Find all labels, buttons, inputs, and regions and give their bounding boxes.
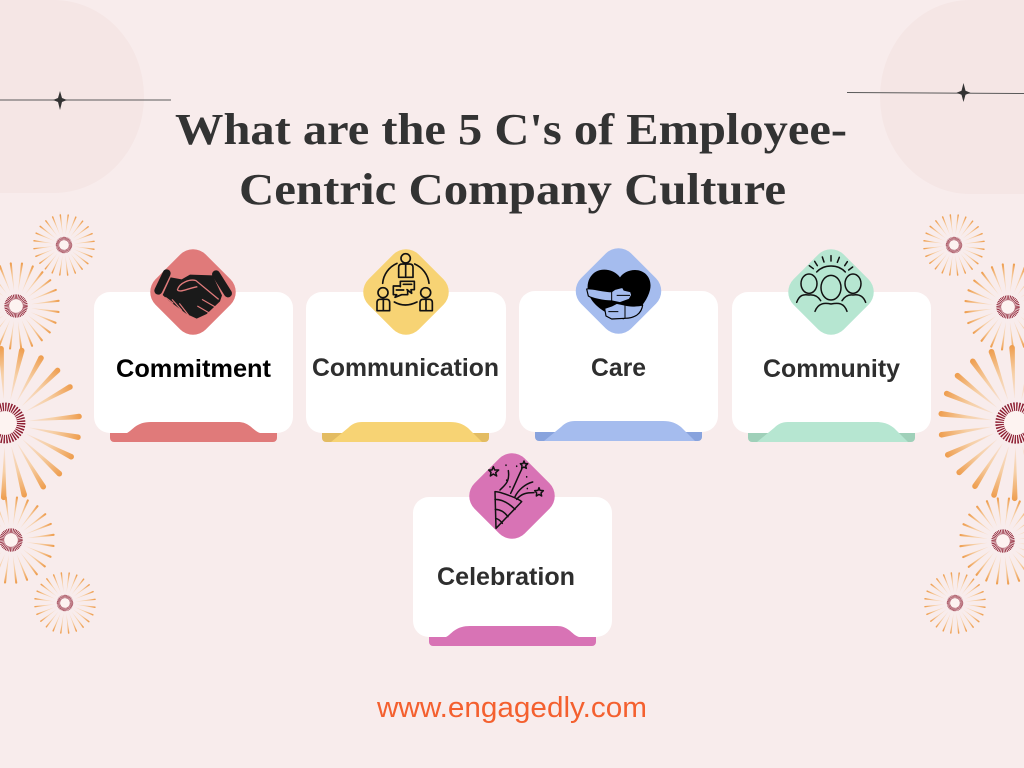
- sparkle line: right: [847, 83, 1024, 102]
- panel: community: [732, 242, 931, 442]
- label: Community: [763, 355, 900, 383]
- icon: heart with hugging arms: [587, 270, 651, 319]
- icon: team communication: [377, 254, 432, 311]
- label: Celebration: [437, 563, 575, 591]
- panel: care: [519, 241, 718, 441]
- website url: www.engagedly.com: [376, 692, 647, 724]
- title: What are the 5 C's of Employee-: [175, 105, 847, 154]
- label: Communication: [312, 354, 499, 382]
- icon: party popper: [489, 461, 543, 528]
- sparkle line: left: [0, 91, 171, 110]
- fireworks: right column: [923, 214, 1024, 634]
- title: [175, 105, 847, 214]
- label: Commitment: [116, 355, 272, 383]
- panel: celebration: [413, 446, 612, 646]
- title: Centric Company Culture: [239, 165, 786, 214]
- icon: community group: [797, 256, 866, 311]
- panel: communication: [306, 242, 506, 442]
- decorative corner blob: left: [0, 0, 144, 193]
- decorative corner blob: right: [880, 0, 1024, 194]
- panel: commitment: [94, 242, 293, 442]
- icon: handshake: [158, 273, 228, 319]
- label: Care: [591, 354, 646, 382]
- fireworks: left column: [0, 214, 96, 634]
